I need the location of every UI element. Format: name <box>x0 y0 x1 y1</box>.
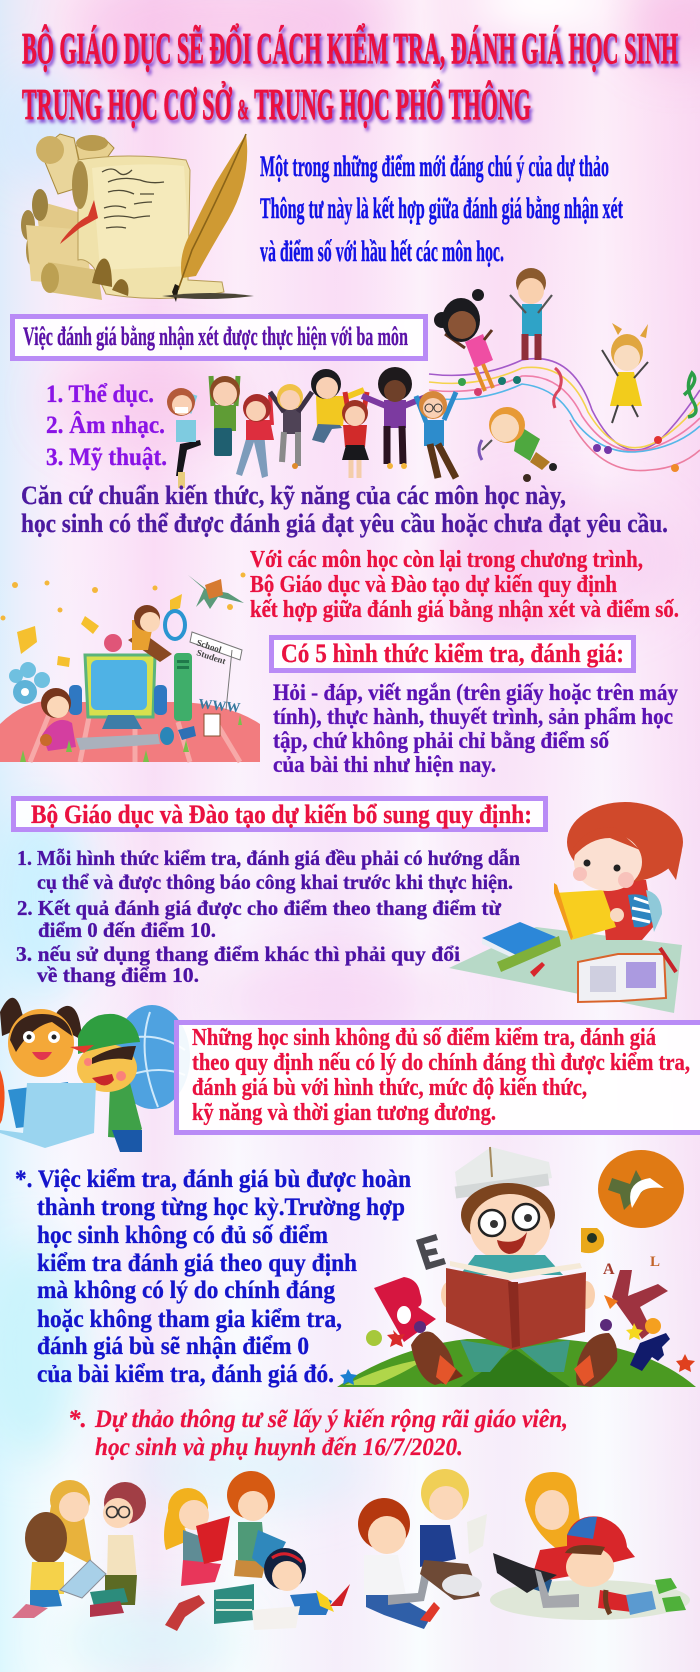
basis paragraph <box>21 481 668 538</box>
make-up assessment paragraph: mà không có lý do chính đáng <box>37 1277 335 1304</box>
panel: make-up assessment <box>176 1022 700 1132</box>
numbered rules: 2. Kết quả đánh giá được cho điểm theo thang điểm từ <box>17 896 501 920</box>
panel: three subjects heading <box>12 316 426 358</box>
make-up assessment paragraph: đánh giá bù sẽ nhận điểm 0 <box>37 1333 309 1360</box>
basis paragraph: Căn cứ chuẩn kiến thức, kỹ năng của các môn học này, <box>21 481 566 510</box>
deadline note <box>68 1406 568 1461</box>
boy in blue shirt <box>510 268 552 360</box>
illustration: two children at laptop with globe <box>0 998 190 1152</box>
panel: make-up assessment: đánh giá bù với hình thức, mức độ kiến thức, <box>192 1075 587 1101</box>
make-up assessment paragraph: thành trong từng học kỳ.Trường hợp <box>37 1194 405 1221</box>
panel: proposed rules heading: Bộ Giáo dục và Đào tạo dự kiến bổ sung quy định: <box>31 800 532 829</box>
five forms paragraph: tính), thực hành, thuyết trình, sản phẩm học <box>273 704 673 729</box>
title <box>22 22 678 129</box>
child 5 <box>311 369 364 443</box>
icon: music staff <box>429 359 700 472</box>
child 6 <box>342 392 369 478</box>
other subjects paragraph <box>250 547 679 623</box>
illustration: children group 4 <box>490 1472 690 1620</box>
make-up assessment paragraph: kiểm tra đánh giá theo quy định <box>37 1250 357 1277</box>
illustration: children with computer: WWW <box>198 697 241 716</box>
illustration: boy reading with letters on hill: A <box>603 1261 615 1278</box>
numbered rules: 3. nếu sử dụng thang điểm khác thì phải quy đổi <box>16 942 460 966</box>
make-up assessment paragraph: của bài kiểm tra, đánh giá đó. <box>37 1361 334 1388</box>
deadline note: học sinh và phụ huynh đến 16/7/2020. <box>95 1434 463 1461</box>
other subjects paragraph: Với các môn học còn lại trong chương trình, <box>250 547 643 573</box>
illustration: children group 3 <box>358 1469 487 1629</box>
child 1 <box>167 388 201 488</box>
subject list: 1. Thể dục. <box>46 381 154 408</box>
make-up assessment paragraph <box>15 1166 411 1388</box>
lying child <box>482 407 557 482</box>
illustration: children with computer: School <box>195 637 223 655</box>
deadline note: Dự thảo thông tư sẽ lấy ý kiến rộng rãi giáo viên, <box>94 1406 568 1433</box>
deadline note: *. <box>68 1406 87 1433</box>
subject list <box>46 381 167 471</box>
numbered rules <box>16 846 520 987</box>
child 3 <box>236 394 274 478</box>
illustration: three children on staff <box>434 268 648 423</box>
illustration: boy reading at desk <box>449 802 683 1013</box>
panel: make-up assessment: kỹ năng và thời gian tương đương. <box>192 1100 496 1126</box>
child 8 <box>416 391 456 478</box>
make-up assessment paragraph: hoặc không tham gia kiểm tra, <box>37 1306 342 1333</box>
make-up assessment paragraph: *. Việc kiểm tra, đánh giá bù được hoàn <box>15 1166 411 1193</box>
child 7 <box>362 367 428 469</box>
make-up assessment paragraph: học sinh không có đủ số điểm <box>37 1222 328 1249</box>
numbered rules: về thang điểm 10. <box>37 963 199 987</box>
numbered rules: 1. Mỗi hình thức kiểm tra, đánh giá đều phải có hướng dẫn <box>17 846 520 870</box>
five forms paragraph <box>273 680 678 777</box>
child 2 <box>210 376 240 456</box>
subject list: 2. Âm nhạc. <box>46 411 165 439</box>
illustration: children group 1 <box>12 1480 146 1618</box>
girl in yellow dress <box>602 323 648 423</box>
five forms paragraph: tập, chứ không phải chỉ bằng điểm số <box>273 728 609 753</box>
numbered rules: điểm 0 đến điểm 10. <box>38 918 216 942</box>
icon: scrolls and quill <box>21 134 254 302</box>
five forms paragraph: của bài thi như hiện nay. <box>273 752 496 777</box>
panel: five forms heading: Có 5 hình thức kiểm tra, đánh giá: <box>281 639 624 668</box>
numbered rules: cụ thể và được thông báo công khai trước khi thực hiện. <box>37 870 513 894</box>
child 4 <box>270 384 312 469</box>
panel: three subjects heading: Việc đánh giá bằng nhận xét được thực hiện với ba môn <box>23 322 408 351</box>
illustration: boy reading with letters on hill <box>337 1147 696 1387</box>
illustration: dancing children <box>167 367 557 488</box>
other subjects paragraph: Bộ Giáo dục và Đào tạo dự kiến quy định <box>250 572 617 598</box>
illustration: children with computer: Student <box>195 647 227 666</box>
girl in pink dress <box>434 289 493 391</box>
intro paragraph <box>260 150 623 268</box>
subject list: 3. Mỹ thuật. <box>46 444 167 471</box>
illustration: boy reading with letters on hill: L <box>650 1254 660 1270</box>
illustration: children with computer <box>0 572 260 762</box>
illustration: children group 2 <box>164 1471 350 1631</box>
